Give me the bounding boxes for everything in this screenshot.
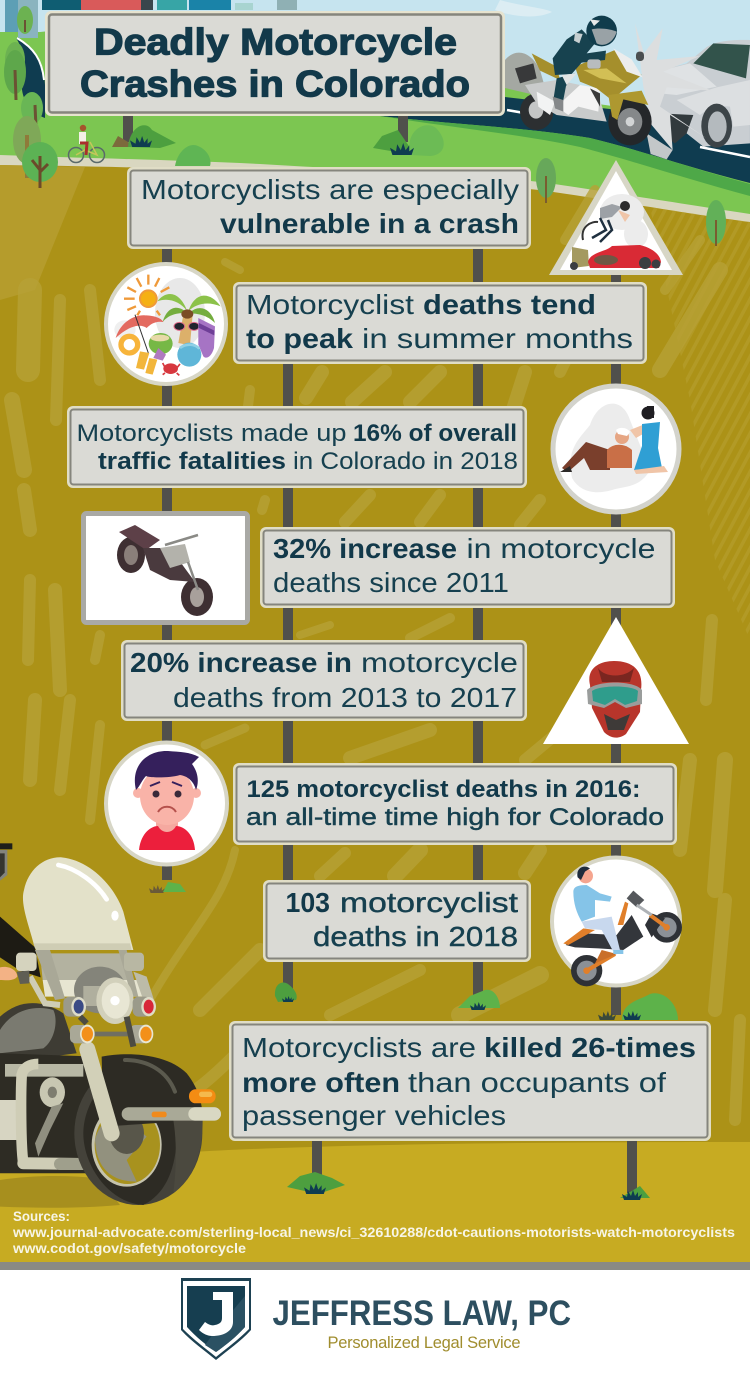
- title text: Deadly Motorcycle: [94, 22, 457, 62]
- icon: injured rider circle: [553, 386, 679, 512]
- sign: 20 percent increase: [121, 640, 527, 721]
- sign: 16 percent of fatalities: 16% of overall: [353, 420, 517, 447]
- shadow under bike: [0, 1176, 120, 1208]
- rider: [553, 29, 606, 75]
- indicator lamps: [63, 997, 83, 1017]
- sign: 125 deaths in 2016: an all-time time high for Colorado: [246, 804, 664, 831]
- title sign: [45, 11, 505, 116]
- sign: 16 percent of fatalities: [67, 406, 527, 488]
- sign: killed 26 times more often: passenger vehicles: [242, 1100, 506, 1131]
- sign: 125 deaths in 2016: 125 motorcyclist deaths in 2016:: [246, 776, 640, 803]
- rear fuel tank: [0, 1003, 77, 1063]
- crash burst: [635, 23, 712, 150]
- sign: killed 26 times more often: Motorcyclists are: [242, 1032, 476, 1063]
- logo wordmark: Personalized Legal Service: [328, 1334, 520, 1352]
- flip flops: [136, 351, 157, 375]
- gold field ground: [0, 155, 750, 1262]
- police motorcycle illustration: [0, 843, 221, 1208]
- sign: killed 26 times more often: more often: [242, 1067, 400, 1098]
- rider arm: [0, 917, 41, 977]
- sign: 20 percent increase: 20% increase in: [130, 647, 352, 678]
- sign: 32 percent increase: [260, 527, 675, 608]
- rear wheel: [520, 93, 553, 130]
- icon: motorcycle square sign: [84, 514, 248, 622]
- title text: [80, 22, 470, 104]
- front wheel: [608, 98, 652, 145]
- sign: killed 26 times more often: killed 26-times: [484, 1032, 696, 1063]
- sign: 103 deaths in 2018: 103: [286, 887, 330, 918]
- sunglasses: [174, 322, 185, 330]
- coconut: [149, 333, 173, 354]
- icon: wheelie rider circle: [552, 858, 682, 986]
- logo shield: [181, 1278, 251, 1360]
- sources: Sources:: [13, 1209, 70, 1224]
- icon: summer beach circle: [106, 264, 226, 384]
- windshield: [23, 857, 133, 950]
- footer band: [0, 1262, 750, 1386]
- front wheel and fender: [74, 1062, 202, 1205]
- front bumper: [122, 1107, 221, 1121]
- mirror: [0, 850, 7, 881]
- sign: 103 deaths in 2018: deaths in 2018: [313, 921, 518, 952]
- sign: 20 percent increase: motorcycle: [361, 647, 518, 678]
- sign: 103 deaths in 2018: motorcyclist: [340, 887, 518, 918]
- body: [566, 915, 643, 950]
- logo wordmark: JEFFRESS LAW, PC: [272, 1294, 571, 1333]
- sign poles: [123, 112, 637, 1193]
- field texture blobs: [12, 190, 740, 1120]
- sign: deaths peak in summer: deaths tend: [423, 289, 596, 320]
- engine and frame: [0, 1053, 100, 1173]
- cyclist: [68, 125, 104, 162]
- headlight: [74, 967, 126, 1013]
- sign: vulnerable in a crash: Motorcyclists are especially: [141, 174, 519, 205]
- sources: [12, 1209, 735, 1256]
- wheels: [571, 955, 602, 986]
- rider: [582, 917, 620, 952]
- crab: [163, 363, 178, 374]
- sources: www.codot.gov/safety/motorcycle: [12, 1241, 247, 1256]
- bushes: [112, 125, 678, 1200]
- sign: vulnerable in a crash: [127, 167, 531, 249]
- sign: 16 percent of fatalities: in Colorado in 2018: [293, 448, 518, 475]
- sign: 32 percent increase: 32% increase: [273, 533, 457, 564]
- sun: [140, 290, 157, 307]
- life ring: [121, 336, 138, 353]
- engine: [525, 80, 607, 122]
- surfboard: [198, 318, 215, 358]
- umbrella: [116, 315, 163, 338]
- sign: vulnerable in a crash: vulnerable in a crash: [220, 208, 519, 239]
- fork: [87, 1049, 112, 1133]
- title text: Crashes in Colorado: [80, 64, 470, 104]
- rear rack and tail: [515, 63, 537, 83]
- sign: 103 deaths in 2018: [263, 880, 531, 962]
- sign: killed 26 times more often: [229, 1021, 711, 1141]
- sign: 125 deaths in 2016: [233, 763, 677, 845]
- sign: deaths peak in summer: to peak: [246, 323, 354, 354]
- sky and hills background: [0, 0, 750, 240]
- sign: 20 percent increase: deaths from 2013 to 2017: [173, 682, 517, 713]
- palm: [178, 315, 193, 345]
- sign: 16 percent of fatalities: traffic fatalities: [98, 448, 286, 475]
- icon: helmet triangle: [543, 617, 689, 744]
- gold tank and fairing: [575, 50, 642, 100]
- sign: killed 26 times more often: than occupants of: [408, 1067, 666, 1098]
- sign: 16 percent of fatalities: Motorcyclists made up: [76, 420, 346, 447]
- beach ball: [177, 343, 201, 367]
- icon: sad face circle: [106, 742, 227, 864]
- sign: 32 percent increase: deaths since 2011: [273, 567, 509, 598]
- motorcyclist crash illustration: [515, 16, 750, 159]
- city skyline: [5, 0, 297, 38]
- sign: deaths peak in summer: Motorcyclist: [246, 289, 414, 320]
- sign: deaths peak in summer: in summer months: [362, 323, 633, 354]
- icon: warning triangle with crash: [549, 160, 683, 275]
- logo wordmark: [272, 1294, 571, 1352]
- sign: deaths peak in summer: [233, 282, 647, 364]
- car: [647, 40, 750, 147]
- trees: [4, 6, 726, 246]
- sign: 32 percent increase: in motorcycle: [466, 533, 656, 564]
- sources: www.journal-advocate.com/sterling-local_news/ci_32610288/cdot-cautions-motorists-watch-motorcyclists: [12, 1225, 735, 1240]
